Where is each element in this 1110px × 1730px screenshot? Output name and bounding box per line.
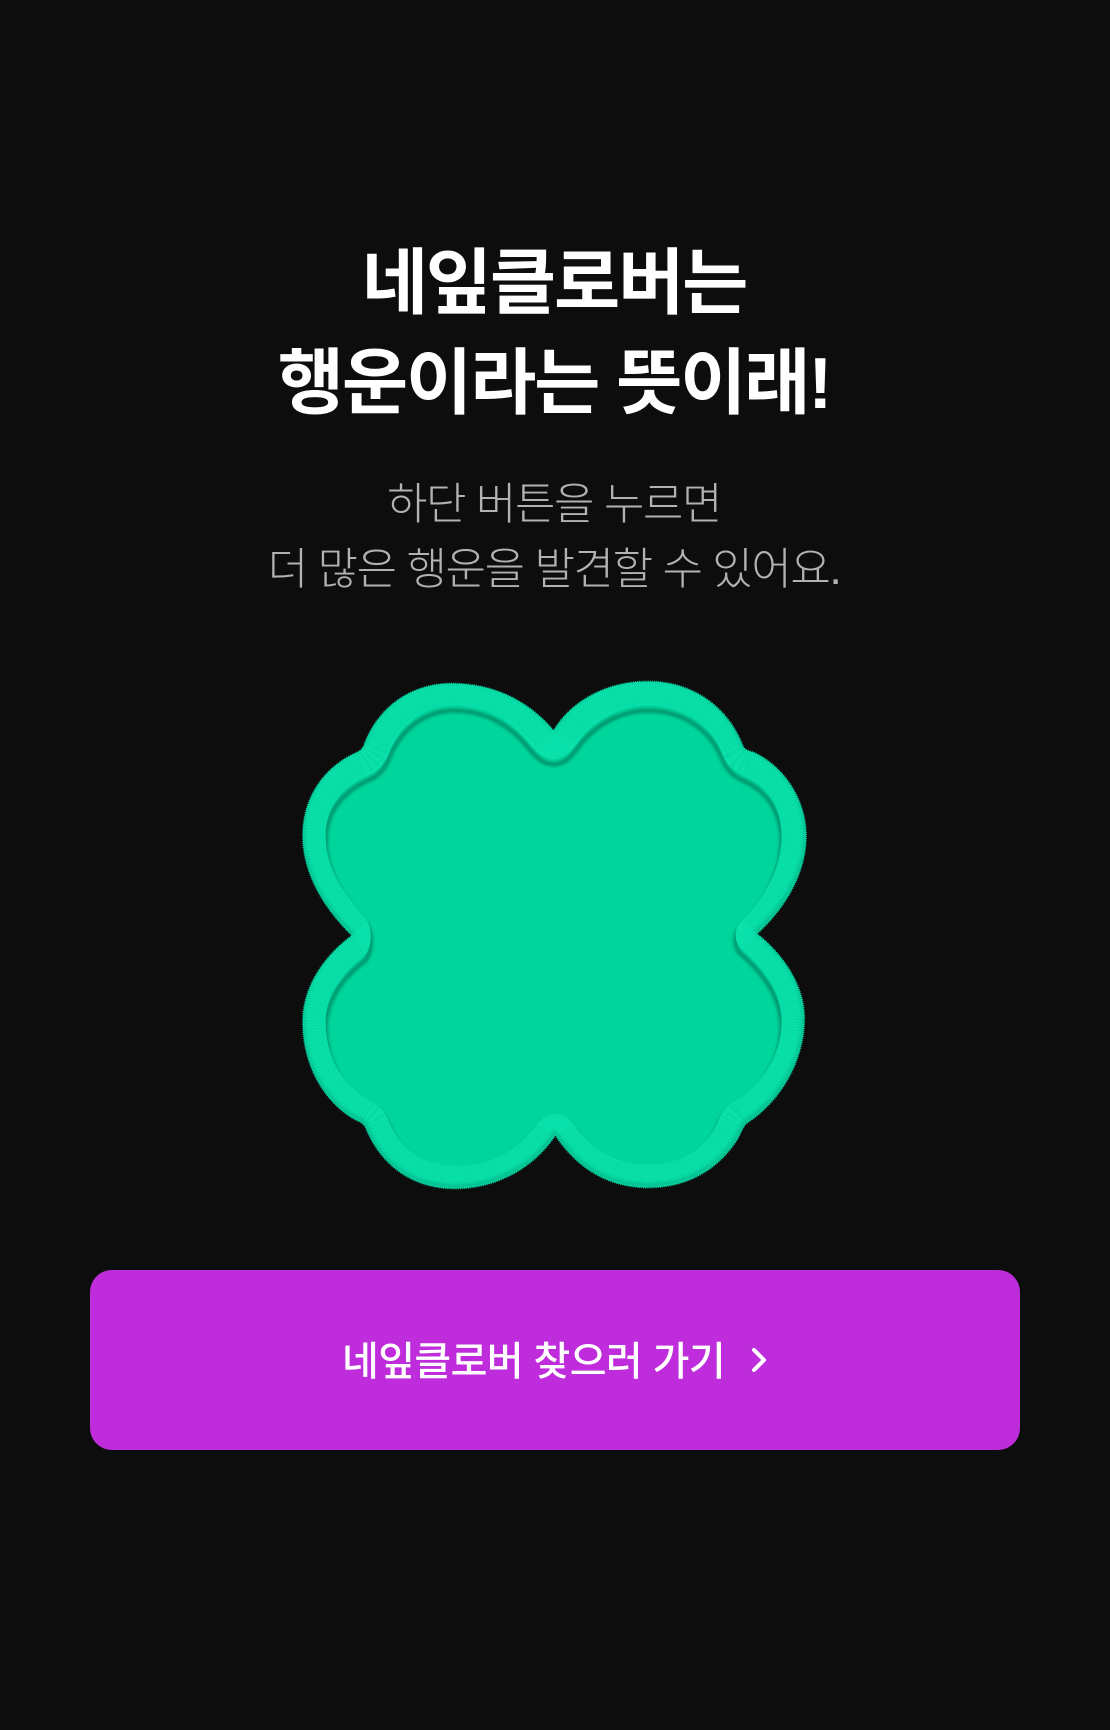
button — [90, 1270, 1020, 1450]
icon: chevron arrow — [752, 1348, 766, 1372]
subtitle text: 더 많은 행운을 발견할 수 있어요. — [268, 545, 840, 594]
subtitle text — [268, 480, 840, 594]
button label: 네잎클로버 찾으러 가기 — [342, 1340, 725, 1384]
title — [278, 244, 830, 424]
subtitle text: 하단 버튼을 누르면 — [387, 480, 721, 529]
inner fabric — [326, 706, 782, 1166]
icon: embroidered four-leaf clover patch — [302, 680, 807, 1190]
title: 네잎클로버는 — [362, 244, 746, 324]
stitched border — [302, 679, 806, 1189]
title: 행운이라는 뜻이래! — [278, 344, 830, 424]
